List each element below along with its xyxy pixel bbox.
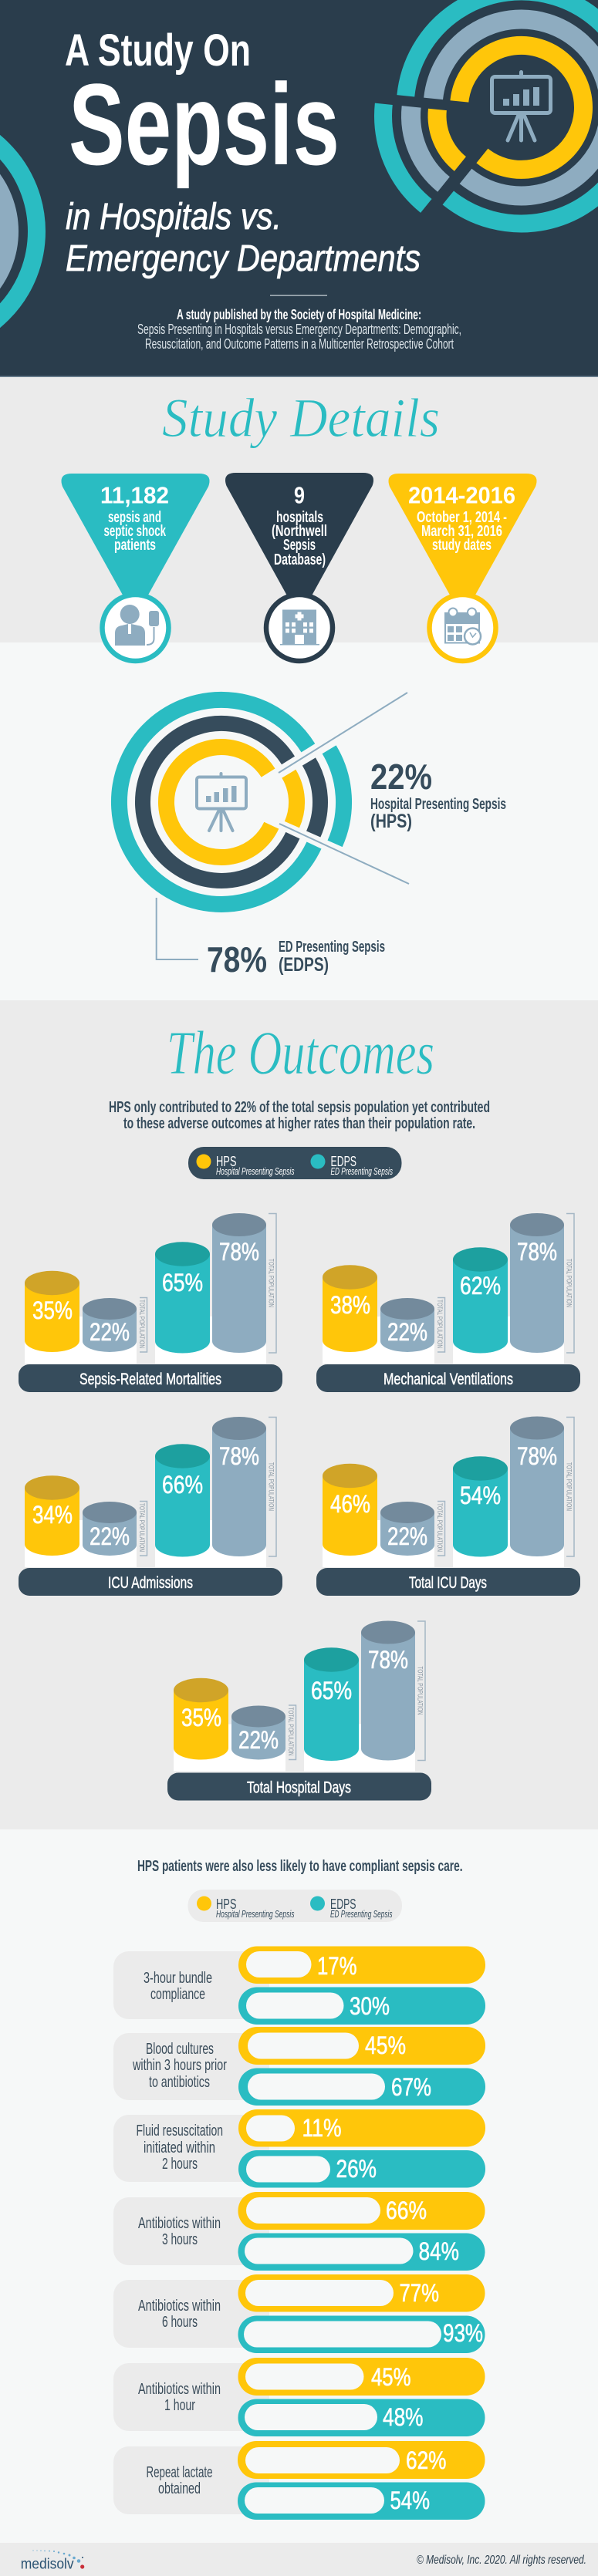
outcomes intro text xyxy=(109,1099,490,1132)
row: repeat lactate: 62% xyxy=(406,2446,446,2474)
row: fluid resuscitation: 2 hours xyxy=(162,2155,198,2173)
row: antibiotics within 3 hours xyxy=(113,2192,485,2271)
title: A Study On xyxy=(65,25,251,76)
bar chart: mechanical ventilations xyxy=(316,1213,580,1392)
bar chart: total ICU days: 54% xyxy=(460,1482,501,1509)
row: antibiotics within 6 hours: Antibiotics within xyxy=(138,2297,221,2315)
bar chart: sepsis-related mortalities: 65% xyxy=(162,1269,203,1296)
panel: population donut xyxy=(0,642,598,1000)
bar chart: mechanical ventilations: Mechanical Ventilations xyxy=(383,1371,513,1388)
bar chart: mechanical ventilations: 22% xyxy=(387,1318,427,1346)
row: 3-hour bundle compliance: 30% xyxy=(350,1992,390,2020)
slice callout lines xyxy=(157,693,409,959)
row: fluid resuscitation xyxy=(113,2109,485,2187)
bar chart: mechanical ventilations: TOTAL POPULATION xyxy=(436,1300,444,1348)
row: blood cultures: 67% xyxy=(391,2073,431,2101)
funnel: study dates: March 31, 2016 xyxy=(421,523,502,540)
callout: 78 percent EDPS: ED Presenting Sepsis xyxy=(279,939,385,956)
bar chart: total hospital days: 65% xyxy=(311,1677,352,1704)
bar chart: total ICU days: Total ICU Days xyxy=(409,1574,487,1592)
legend: light: HPS xyxy=(216,1897,236,1912)
bar chart: ICU admissions: ICU Admissions xyxy=(108,1574,193,1592)
bar chart: mechanical ventilations: 62% xyxy=(460,1272,501,1300)
row: repeat lactate: Repeat lactate xyxy=(147,2463,213,2481)
bar chart: total hospital days: TOTAL POPULATION xyxy=(417,1666,424,1715)
bar chart: ICU admissions: TOTAL POPULATION xyxy=(138,1503,146,1552)
legend: dark: HPS xyxy=(216,1154,236,1169)
legend: dark: Hospital Presenting Sepsis xyxy=(216,1166,295,1177)
bar chart: total hospital days: 78% xyxy=(368,1646,408,1674)
callout: 22 percent HPS: (HPS) xyxy=(370,811,412,832)
panel: the outcomes xyxy=(0,1000,598,1829)
panel: footer xyxy=(0,2543,598,2576)
callout: 78 percent EDPS xyxy=(207,939,385,979)
row: antibiotics within 1 hour: 48% xyxy=(383,2403,423,2431)
legend: light: EDPS xyxy=(330,1897,356,1912)
bar chart: sepsis-related mortalities xyxy=(19,1213,282,1392)
bar chart: total hospital days: 22% xyxy=(238,1726,279,1754)
row: blood cultures xyxy=(113,2027,485,2106)
row: antibiotics within 1 hour: 45% xyxy=(371,2363,410,2391)
bar chart: sepsis-related mortalities: Sepsis-Related Mortalities xyxy=(79,1371,221,1388)
bar chart: total hospital days: 35% xyxy=(181,1704,221,1731)
bar chart: total hospital days: TOTAL POPULATION xyxy=(287,1708,295,1755)
title: Sepsis xyxy=(69,59,340,189)
row: fluid resuscitation: 11% xyxy=(302,2114,341,2142)
legend: dark: EDPS xyxy=(330,1154,356,1169)
funnel: patients: 11,182 xyxy=(100,482,169,509)
bar chart: sepsis-related mortalities: 35% xyxy=(32,1296,73,1324)
funnel: study dates: 2014-2016 xyxy=(408,482,515,509)
bar chart: ICU admissions: 22% xyxy=(90,1522,130,1550)
panel: study details xyxy=(0,376,598,661)
panel: compliance xyxy=(0,1829,598,2543)
bar chart: total hospital days: Total Hospital Days xyxy=(247,1779,351,1797)
icon: calendar with clock xyxy=(444,608,481,645)
row: antibiotics within 3 hours: 3 hours xyxy=(162,2230,198,2248)
bar chart: sepsis-related mortalities: 22% xyxy=(90,1318,130,1346)
funnel: study dates: study dates xyxy=(432,537,492,554)
heading: study details: Study Details xyxy=(162,387,440,449)
bar chart: total ICU days: TOTAL POPULATION xyxy=(436,1503,444,1552)
bar chart: total ICU days: 46% xyxy=(330,1490,370,1518)
row: 3-hour bundle compliance: 3-hour bundle xyxy=(144,1969,212,1987)
study citation xyxy=(137,307,461,352)
callout: 22 percent HPS: 22% xyxy=(370,757,432,797)
funnel: hospitals: 9 xyxy=(294,482,305,509)
bar chart: total ICU days: 78% xyxy=(517,1442,557,1470)
funnel: study dates xyxy=(389,474,537,661)
logo: medisolv xyxy=(21,2550,84,2573)
row: fluid resuscitation: 26% xyxy=(336,2155,377,2183)
row: 3-hour bundle compliance xyxy=(113,1947,485,2025)
row: antibiotics within 6 hours: 77% xyxy=(400,2279,439,2307)
logo: medisolv: medisolv xyxy=(21,2557,74,2573)
icon: presentation board xyxy=(492,70,551,140)
bar chart: sepsis-related mortalities: 78% xyxy=(219,1238,259,1266)
row: repeat lactate: obtained xyxy=(158,2480,201,2497)
title xyxy=(65,25,421,279)
bar chart: total ICU days: TOTAL POPULATION xyxy=(565,1462,573,1511)
funnel: patients: patients xyxy=(114,537,156,554)
row: fluid resuscitation: initiated within xyxy=(144,2139,215,2156)
funnel: patients: septic shock xyxy=(103,523,167,540)
icon: presentation board xyxy=(197,772,246,831)
funnel: patients xyxy=(62,474,210,661)
bar chart: ICU admissions xyxy=(19,1417,282,1596)
bar chart: mechanical ventilations: TOTAL POPULATION xyxy=(565,1259,573,1307)
funnel: study dates: October 1, 2014 - xyxy=(417,509,507,526)
bar chart: ICU admissions: 34% xyxy=(32,1501,73,1529)
bar chart: total ICU days xyxy=(316,1416,580,1596)
legend: light: Hospital Presenting Sepsis xyxy=(216,1909,295,1920)
legend: light: ED Presenting Sepsis xyxy=(330,1909,392,1920)
bar chart: sepsis-related mortalities: TOTAL POPULATION xyxy=(138,1300,146,1348)
row: blood cultures: to antibiotics xyxy=(149,2073,210,2091)
row: antibiotics within 6 hours: 93% xyxy=(443,2319,483,2347)
funnel: hospitals: Sepsis xyxy=(283,537,316,554)
study citation: A study published by the Society of Hospital Medicine: xyxy=(177,307,421,322)
callout: 22 percent HPS: Hospital Presenting Sepsis xyxy=(370,796,506,813)
row: blood cultures: Blood cultures xyxy=(146,2040,214,2058)
bar chart: ICU admissions: 66% xyxy=(162,1471,203,1499)
row: antibiotics within 6 hours xyxy=(113,2274,485,2353)
funnel: hospitals xyxy=(225,473,373,661)
panel: header xyxy=(0,0,598,377)
decorative target rings left xyxy=(0,116,37,347)
row: antibiotics within 3 hours: 66% xyxy=(386,2197,427,2224)
bar chart: total hospital days xyxy=(167,1621,431,1800)
legend: light xyxy=(188,1890,402,1922)
row: 3-hour bundle compliance: 17% xyxy=(317,1952,356,1980)
legend: dark: ED Presenting Sepsis xyxy=(330,1166,393,1177)
bar chart: mechanical ventilations: 38% xyxy=(330,1291,370,1319)
row: antibiotics within 6 hours: 6 hours xyxy=(162,2313,198,2331)
row: antibiotics within 1 hour xyxy=(113,2358,485,2436)
donut rings with 22 percent slice xyxy=(119,700,344,904)
row: fluid resuscitation: Fluid resuscitation xyxy=(136,2122,223,2139)
bar chart: ICU admissions: TOTAL POPULATION xyxy=(267,1462,275,1511)
row: antibiotics within 3 hours: Antibiotics within xyxy=(138,2214,221,2232)
target rings chart with exploded slice xyxy=(383,0,598,224)
funnel: hospitals: Database) xyxy=(274,551,326,568)
row: repeat lactate xyxy=(113,2441,485,2520)
callout: 78 percent EDPS: 78% xyxy=(207,939,267,979)
row: repeat lactate: 54% xyxy=(390,2487,430,2514)
bar chart: total ICU days: 22% xyxy=(387,1522,427,1550)
row: 3-hour bundle compliance: compliance xyxy=(150,1985,205,2003)
funnel: patients: sepsis and xyxy=(108,509,161,526)
icon: patient with IV xyxy=(115,605,159,646)
row: antibiotics within 1 hour: Antibiotics within xyxy=(138,2380,221,2398)
bar chart: mechanical ventilations: 78% xyxy=(517,1238,557,1266)
row: antibiotics within 3 hours: 84% xyxy=(418,2237,459,2265)
title: Emergency Departments xyxy=(66,238,421,279)
icon: hospital building xyxy=(280,609,319,645)
bar chart: sepsis-related mortalities: TOTAL POPULATION xyxy=(267,1259,275,1307)
row: blood cultures: within 3 hours prior xyxy=(132,2056,227,2074)
legend: dark xyxy=(188,1147,401,1179)
funnel: hospitals: hospitals xyxy=(276,509,323,526)
callout: 78 percent EDPS: (EDPS) xyxy=(279,954,329,976)
heading: the outcomes: The Outcomes xyxy=(167,1020,434,1087)
funnel: hospitals: (Northwell xyxy=(272,523,327,540)
row: antibiotics within 1 hour: 1 hour xyxy=(164,2396,195,2414)
title: in Hospitals vs. xyxy=(66,197,282,238)
row: blood cultures: 45% xyxy=(365,2031,406,2059)
bar chart: ICU admissions: 78% xyxy=(219,1442,259,1470)
callout: 22 percent HPS xyxy=(370,757,506,832)
study citation: Resuscitation, and Outcome Patterns in a Multicenter Retrospective Cohort xyxy=(145,336,454,352)
